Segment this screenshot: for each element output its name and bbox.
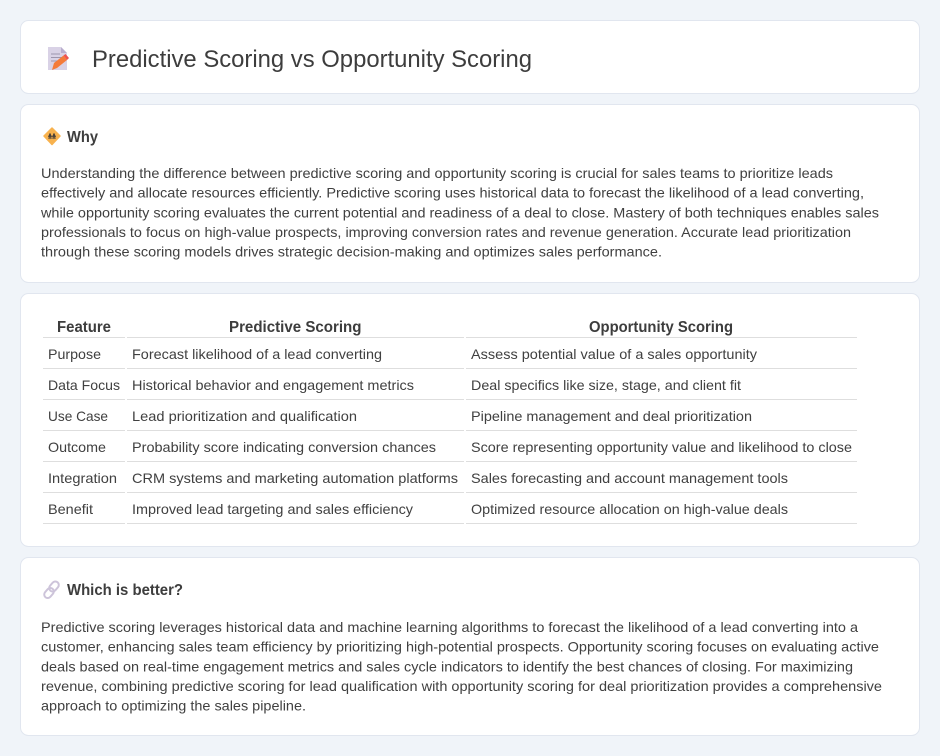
row: use case: Lead prioritization and qualification — [132, 408, 357, 424]
row: integration — [48, 470, 788, 486]
row: use case — [48, 408, 752, 424]
table header — [57, 319, 733, 336]
row: data focus — [48, 377, 741, 393]
text block: which is better paragraph: customer, enhancing sales team efficiency by prioritizing high-potential prospects. Opportunity scoring focuses on evaluating active — [41, 639, 879, 655]
row: benefit — [48, 501, 788, 517]
text block: which is better paragraph: approach to optimizing the sales pipeline. — [41, 698, 306, 714]
heading: which is better: Which is better? — [67, 582, 183, 599]
panel: title card — [20, 20, 920, 94]
heading: why: Why — [67, 129, 98, 146]
title: Predictive Scoring vs Opportunity Scoring — [92, 46, 532, 73]
row: data focus: Deal specifics like size, stage, and client fit — [471, 377, 741, 393]
icon: diamond sign — [44, 128, 60, 144]
panel: which is better — [20, 558, 920, 736]
icon: chain link — [43, 580, 60, 599]
row: integration: CRM systems and marketing automation platforms — [132, 470, 458, 486]
row: benefit: Improved lead targeting and sales efficiency — [132, 501, 413, 517]
row: benefit: Benefit — [48, 501, 93, 517]
text block: why paragraph: professionals to focus on high-value prospects, improving conversion rates and revenue generation. Accurate lead prioritization — [41, 224, 851, 240]
text block: why paragraph: while opportunity scoring evaluates the current potential and readiness of a deal to close. Mastery of both techniques enables sales — [40, 204, 879, 220]
row: purpose: Forecast likelihood of a lead converting — [132, 346, 382, 362]
icon: document with pencil — [48, 47, 69, 70]
row: purpose: Purpose — [48, 346, 101, 362]
table header: Predictive Scoring — [229, 319, 362, 336]
text block: why paragraph: through these scoring models drives strategic decision-making and optimizes sales performance. — [41, 244, 662, 260]
row: purpose — [48, 346, 757, 362]
row: integration: Sales forecasting and account management tools — [471, 470, 788, 486]
text block: which is better paragraph — [41, 619, 882, 714]
row: benefit: Optimized resource allocation on high-value deals — [471, 501, 788, 517]
text block: which is better paragraph: revenue, combining predictive scoring for lead qualification with opportunity scoring for deal prioritization provides a comprehensive — [41, 678, 882, 694]
text block: why paragraph — [40, 165, 879, 260]
row: outcome — [48, 439, 852, 455]
text block: why paragraph: Understanding the difference between predictive scoring and opportunity scoring is crucial for sales teams to prioritize leads — [41, 165, 833, 181]
row: outcome: Outcome — [48, 439, 106, 455]
row: data focus: Historical behavior and engagement metrics — [132, 377, 414, 393]
text block: which is better paragraph: Predictive scoring leverages historical data and machine learning algorithms to forecast the likelihood of a lead converting into a — [41, 619, 858, 635]
row: outcome: Probability score indicating conversion chances — [132, 439, 436, 455]
row: use case: Use Case — [48, 408, 108, 424]
row: outcome: Score representing opportunity value and likelihood to close — [471, 439, 852, 455]
table header: Feature — [57, 319, 111, 336]
text block: which is better paragraph: deals based on real-time engagement metrics and sales cycle indicators to identify the best chances of closing. For maximizing — [41, 658, 853, 674]
row: data focus: Data Focus — [48, 377, 120, 393]
panel: comparison table — [20, 294, 920, 546]
text block: why paragraph: effectively and allocate resources efficiently. Predictive scoring uses historical data to forecast the likelihood of a lead converting, — [41, 185, 864, 201]
panel: why — [20, 104, 920, 282]
table header: Opportunity Scoring — [589, 319, 733, 336]
row: integration: Integration — [48, 470, 117, 486]
row: use case: Pipeline management and deal prioritization — [471, 408, 752, 424]
row: purpose: Assess potential value of a sales opportunity — [471, 346, 757, 362]
